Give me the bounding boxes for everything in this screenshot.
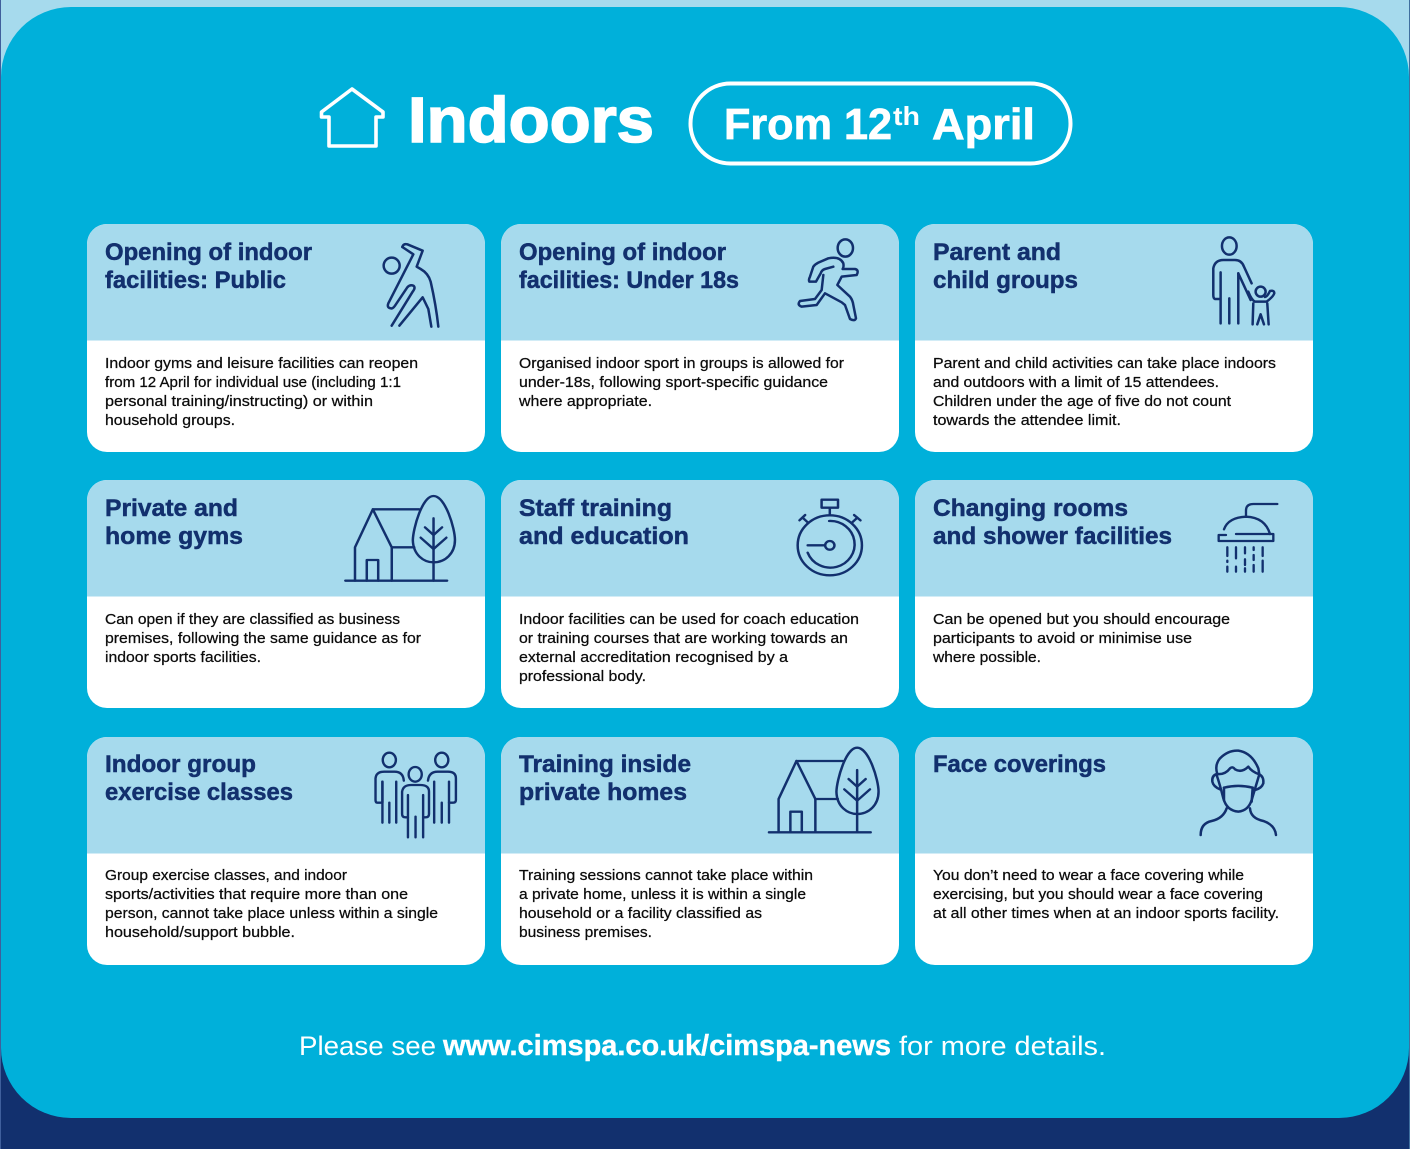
body text: Indoor facilities can be used for coach education: [519, 611, 859, 628]
heading: Private and: [105, 495, 238, 522]
heading: facilities: Under 18s: [519, 267, 739, 294]
heading: [519, 495, 689, 550]
icon: stretching person: [384, 244, 438, 327]
date pill: April: [932, 100, 1035, 149]
heading: private homes: [519, 779, 687, 806]
body text: a private home, unless it is within a single: [519, 886, 806, 903]
heading: Opening of indoor: [105, 239, 312, 266]
heading: Indoor group: [105, 751, 256, 778]
icon: stopwatch: [798, 500, 862, 575]
panel: Staff training and education: [501, 480, 899, 708]
body text: exercising, but you should wear a face covering: [933, 886, 1263, 903]
body text: under-18s, following sport-specific guidance: [519, 374, 828, 391]
body text: Organised indoor sport in groups is allowed for: [519, 355, 844, 372]
body text: or training courses that are working towards an: [519, 630, 848, 647]
heading: [933, 239, 1078, 294]
body text: household or a facility classified as: [519, 905, 762, 922]
heading: exercise classes: [105, 779, 293, 806]
body text: external accreditation recognised by a: [519, 649, 789, 666]
icon: group of people: [376, 753, 456, 837]
icon: person wearing face mask: [1201, 751, 1276, 835]
body text: where possible.: [932, 649, 1041, 666]
body text: Training sessions cannot take place within: [519, 867, 813, 884]
footer note: www.cimspa.co.uk/cimspa-news: [442, 1030, 891, 1062]
date pill: From 12: [724, 100, 892, 149]
footer note: [299, 1030, 1106, 1062]
heading: facilities: Public: [105, 267, 286, 294]
body text: towards the attendee limit.: [933, 412, 1121, 429]
body text: household groups.: [105, 412, 235, 429]
heading: [105, 751, 293, 806]
body text: Children under the age of five do not count: [933, 393, 1232, 410]
heading: home gyms: [105, 523, 243, 550]
body text: at all other times when at an indoor sports facility.: [933, 905, 1279, 922]
heading: Opening of indoor: [519, 239, 726, 266]
heading: [933, 495, 1172, 550]
panel: Changing rooms and shower facilities: [915, 480, 1313, 708]
heading: [105, 239, 312, 294]
body text: professional body.: [519, 668, 646, 685]
body text: [105, 611, 421, 666]
icon: house: [322, 89, 383, 146]
panel: Indoor group exercise classes: [87, 737, 485, 965]
body text: You don’t need to wear a face covering while: [933, 867, 1244, 884]
footer note: for more details.: [899, 1031, 1106, 1061]
body text: Can open if they are classified as business: [105, 611, 400, 628]
body text: business premises.: [519, 924, 652, 941]
heading: [519, 751, 691, 806]
panel: Parent and child groups: [915, 224, 1313, 452]
body text: household/support bubble.: [105, 924, 295, 941]
body text: [105, 355, 418, 429]
heading: child groups: [933, 267, 1078, 294]
body text: person, cannot take place unless within a single: [105, 905, 438, 922]
panel: Private and home gyms: [87, 480, 485, 708]
heading: Face coverings: [933, 751, 1106, 778]
icon: house and tree: [345, 496, 455, 581]
body text: from 12 April for individual use (including 1:1: [105, 374, 401, 391]
body text: personal training/instructing) or within: [105, 393, 373, 410]
body text: Can be opened but you should encourage: [933, 611, 1230, 628]
panel: Face coverings: [915, 737, 1313, 965]
heading: Staff training: [519, 495, 672, 522]
heading: [519, 239, 739, 294]
icon: shower: [1219, 504, 1277, 572]
body text: premises, following the same guidance as for: [105, 630, 421, 647]
title: Indoors: [408, 84, 654, 156]
date pill: th: [893, 101, 920, 131]
body text: where appropriate.: [518, 393, 652, 410]
icon: house and tree: [769, 748, 879, 832]
body text: [933, 355, 1276, 429]
panel: Training inside private homes: [501, 737, 899, 965]
panel: Opening of indoor facilities: Under 18s: [501, 224, 899, 452]
heading: and education: [519, 523, 689, 550]
body text: [933, 867, 1279, 922]
date pill: [690, 84, 1070, 164]
body text: participants to avoid or minimise use: [933, 630, 1192, 647]
body text: Parent and child activities can take place indoors: [933, 355, 1276, 372]
body text: Indoor gyms and leisure facilities can reopen: [105, 355, 418, 372]
body text: indoor sports facilities.: [105, 649, 261, 666]
heading: Changing rooms: [933, 495, 1128, 522]
heading: Training inside: [519, 751, 691, 778]
body text: [518, 355, 844, 410]
body text: [519, 611, 859, 685]
icon: runner: [799, 239, 858, 320]
icon: parent and child: [1213, 237, 1274, 324]
heading: Parent and: [933, 239, 1061, 266]
body text: [105, 867, 438, 941]
body text: [519, 867, 813, 941]
footer note: Please see: [299, 1031, 436, 1061]
heading: [105, 495, 243, 550]
body text: Group exercise classes, and indoor: [105, 867, 347, 884]
body text: and outdoors with a limit of 15 attendees.: [933, 374, 1219, 391]
body text: [932, 611, 1230, 666]
body text: sports/activities that require more than one: [105, 886, 408, 903]
heading: and shower facilities: [933, 523, 1172, 550]
panel: Opening of indoor facilities: Public: [87, 224, 485, 452]
